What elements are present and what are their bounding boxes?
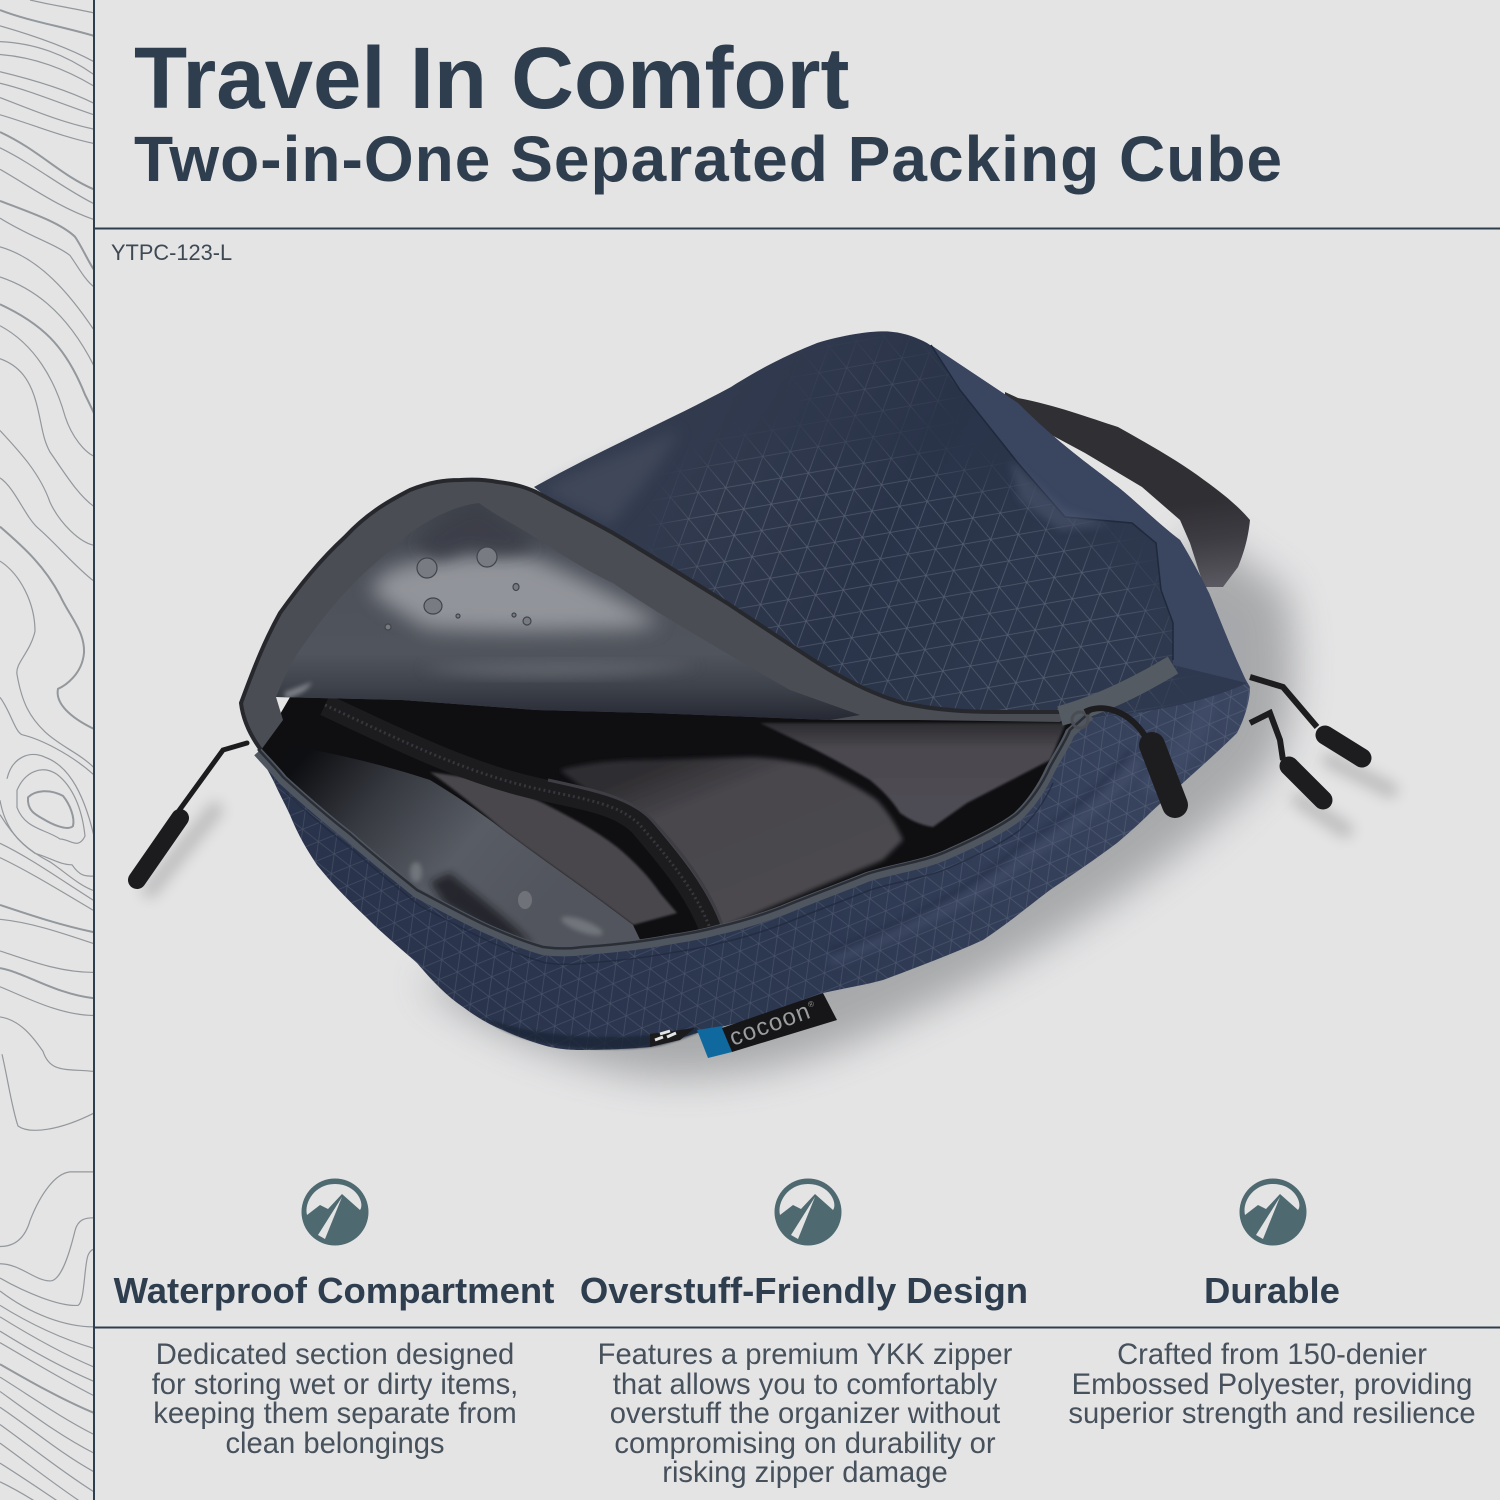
description: Embossed Polyester, providing [1072, 1369, 1472, 1401]
fabric rim band [241, 480, 1070, 750]
bag shadow [420, 530, 1294, 1077]
feature: waterproof compartment [114, 1178, 554, 1460]
product photo: packing cube [137, 331, 1390, 1077]
inner zipper [325, 705, 710, 928]
inner cavity [258, 680, 1090, 952]
icon: mountain badge [1240, 1178, 1306, 1246]
heading: Overstuff-Friendly Design [580, 1270, 1028, 1311]
heading: Waterproof Compartment [114, 1270, 554, 1311]
brand label: ® [807, 999, 816, 1010]
pouch highlights [410, 862, 605, 939]
description: Features a premium YKK zipper [598, 1339, 1013, 1371]
pouch crease [430, 873, 533, 945]
clothes fold left [430, 772, 677, 925]
zipper rim on flap [241, 480, 1173, 750]
waterproof membrane [270, 495, 870, 725]
product code: YTPC-123-L [111, 240, 232, 265]
clothes and inner compartment [275, 705, 1066, 955]
title: Travel In Comfort [134, 30, 849, 127]
fold crease [830, 750, 1130, 950]
icon: mountain badge [774, 1178, 842, 1246]
water droplets [385, 547, 531, 630]
heading: Durable [1204, 1270, 1340, 1311]
folded grey clothes centre [560, 757, 903, 930]
feature: durable [1068, 1178, 1476, 1430]
flap panel beyond seam [931, 345, 1247, 683]
upper navy flap [534, 331, 1247, 720]
description: superior strength and resilience [1068, 1398, 1476, 1430]
description: that allows you to comfortably [613, 1369, 998, 1401]
brand label: cocoon [726, 997, 815, 1052]
subtitle: Two-in-One Separated Packing Cube [134, 123, 1283, 195]
description: Crafted from 150-denier [1117, 1339, 1427, 1371]
description: compromising on durability or [614, 1428, 996, 1460]
flap soft light [1010, 460, 1110, 530]
pull shadows [150, 760, 1390, 890]
folded grey clothes right [760, 723, 1066, 827]
description: keeping them separate from [153, 1398, 517, 1430]
hem shading [463, 1007, 697, 1049]
zipper pull left [137, 743, 247, 880]
handle [1005, 392, 1250, 587]
inner lining with water droplets [241, 480, 1070, 750]
description: for storing wet or dirty items, [152, 1369, 518, 1401]
description: clean belongings [225, 1428, 445, 1460]
droplet on pouch [518, 891, 532, 909]
feature: overstuff-friendly design [580, 1178, 1028, 1489]
zipper pull centre [1072, 708, 1175, 805]
description: overstuff the organizer without [610, 1398, 1000, 1430]
description: risking zipper damage [662, 1457, 948, 1489]
zipper pulls right [1250, 677, 1362, 800]
waterproof pouch [298, 753, 640, 946]
zipper on body [258, 712, 1090, 964]
brand label [650, 993, 837, 1058]
lower body [258, 660, 1250, 1050]
panel: topographic contour strip [0, 0, 94, 1500]
icon: mountain badge [302, 1178, 368, 1246]
description: Dedicated section designed [156, 1339, 514, 1371]
